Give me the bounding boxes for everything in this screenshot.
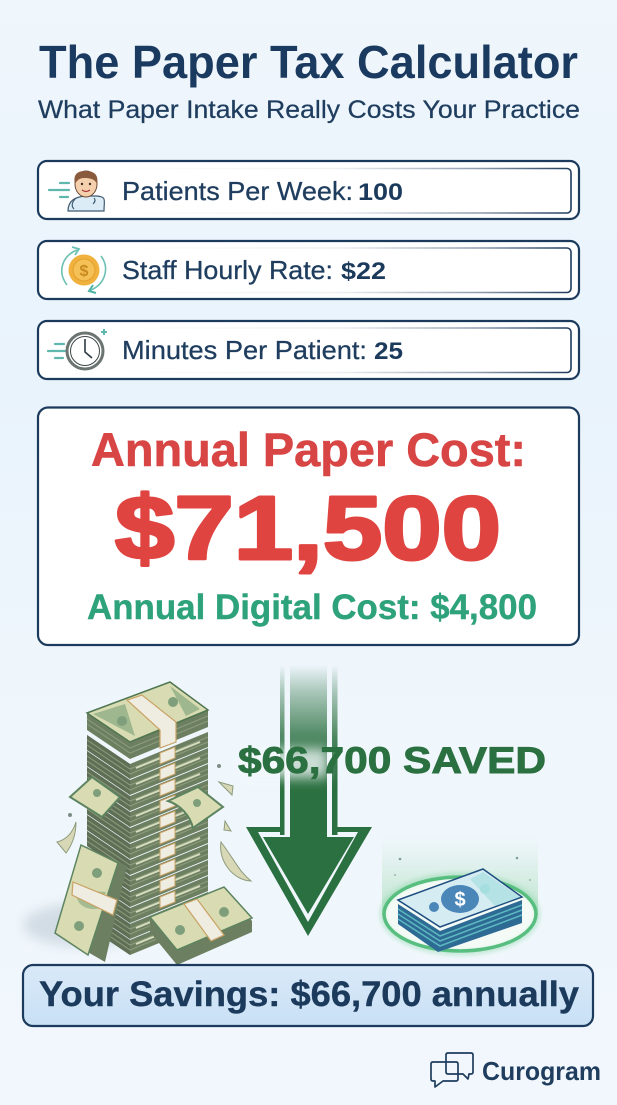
logo: Curogram: [431, 1053, 601, 1087]
icon: coin with arrows: $: [80, 263, 89, 280]
label and value: Staff Hourly Rate:: [122, 255, 333, 285]
title: The Paper Tax Calculator: [39, 36, 578, 88]
panel: patients per week: [38, 161, 579, 219]
loose bill left: [70, 777, 120, 817]
panel: staff hourly rate: [38, 241, 579, 299]
panel: minutes per patient: 25: [374, 338, 403, 365]
annual digital cost: Annual Digital Cost: $4,800: [87, 588, 537, 627]
saved amount label: $66,700 SAVED: [238, 740, 546, 781]
illustration: small digital money: [382, 835, 538, 953]
label and value: Patients Per Week:: [122, 176, 353, 206]
panel: annual cost: [38, 408, 579, 645]
savings bar: Your Savings: $66,700 annually: [39, 975, 580, 1014]
icon: doctor: [49, 171, 104, 211]
panel: minutes per patient: [38, 321, 579, 379]
lying bundle: [150, 888, 252, 965]
panel: patients per week: 100: [358, 179, 403, 206]
wordmark: Curogram: [482, 1056, 601, 1086]
loose bill right: [168, 787, 223, 828]
icon: chat bubbles: [431, 1053, 473, 1087]
annual paper cost label: Annual Paper Cost:: [91, 423, 526, 476]
icon: coin with arrows: [62, 247, 106, 293]
icon: clock: [48, 329, 107, 369]
savings bar: [23, 965, 593, 1026]
illustration: small digital money: $: [454, 889, 466, 911]
panel: staff hourly rate: $22: [341, 258, 386, 285]
subtitle: What Paper Intake Really Costs Your Practice: [38, 96, 580, 124]
leaning bundle: [55, 845, 127, 962]
illustration: stack of money: [23, 682, 252, 965]
paper scraps: [57, 782, 251, 881]
paper cost value: $71,500: [115, 479, 501, 579]
arrow: savings: [246, 665, 372, 936]
top bundle: [87, 710, 208, 759]
label and value: Minutes Per Patient:: [122, 335, 367, 365]
